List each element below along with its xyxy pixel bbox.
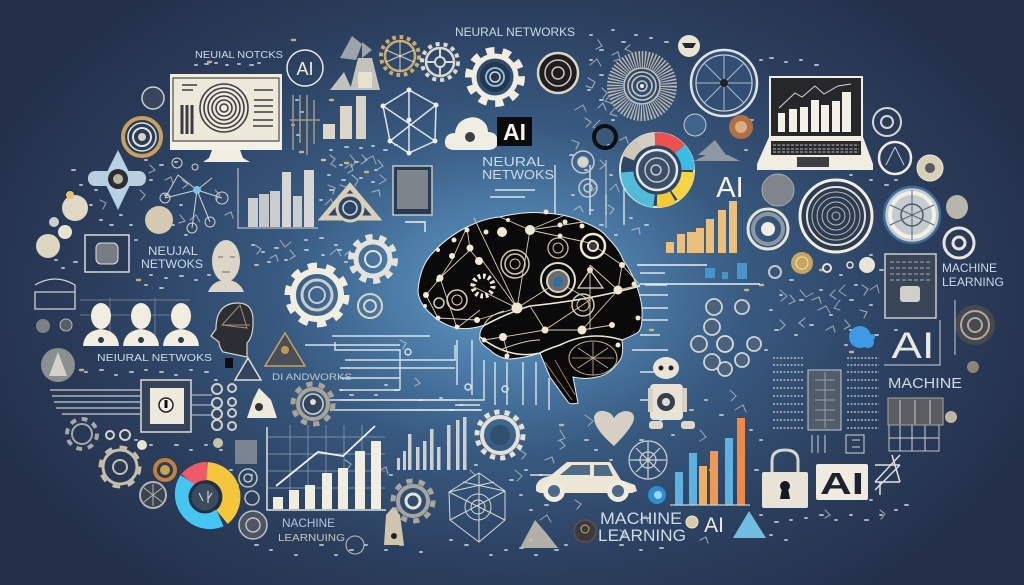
gear centre bbox=[477, 412, 523, 458]
network polygon bbox=[449, 473, 505, 542]
ring cluster bbox=[691, 299, 761, 376]
text: Machine Learning bottom bbox=[598, 509, 686, 545]
bar chart colourful bbox=[670, 418, 750, 505]
icon: head profile bbox=[211, 303, 253, 368]
icon: small circle bbox=[142, 87, 164, 109]
monitor with spiral bbox=[170, 74, 282, 162]
bar chart orange bbox=[666, 201, 737, 253]
text: Neural Networks centre: NETWOKS bbox=[482, 167, 554, 182]
icon: gray medallion bbox=[36, 319, 75, 382]
icon: parallelogram hatch bbox=[875, 455, 900, 495]
icon: diamond compass bbox=[88, 150, 146, 210]
text: Neural Networks left bbox=[141, 244, 203, 271]
orange ring bbox=[155, 460, 175, 480]
chart: spiral on monitor screen bbox=[200, 84, 248, 132]
text: Neural Networks left: NETWOKS bbox=[141, 257, 203, 271]
small cone icon bbox=[346, 507, 404, 554]
chart: people row bbox=[80, 298, 199, 346]
grid panel lower right bbox=[888, 398, 957, 451]
clutter: small scattered marks bbox=[55, 30, 908, 555]
icon: padlock bbox=[762, 450, 808, 508]
gears lower left bbox=[67, 419, 147, 487]
icon: robot bbox=[648, 357, 695, 429]
text columns panel bbox=[773, 358, 879, 453]
donut chart colours bbox=[620, 133, 694, 207]
icon: person bbox=[83, 303, 119, 346]
brain: network edges bbox=[426, 215, 640, 355]
icon: tan pyramid bbox=[520, 520, 558, 548]
line chart bbox=[267, 425, 386, 510]
title text: Neural Networks top: NEURAL NETWORKS bbox=[455, 25, 575, 39]
gear bottom left of centre bbox=[393, 481, 433, 521]
network diagram left bbox=[160, 158, 228, 233]
icon: bell triangle bbox=[247, 388, 277, 418]
text: Machine Learning bottom-left: LEARNUING bbox=[278, 532, 345, 544]
panel: square right bbox=[885, 254, 936, 318]
chip with lines bbox=[50, 380, 212, 432]
text: AI bottom: AI bbox=[704, 514, 724, 537]
vertical rule bbox=[605, 160, 607, 228]
text: AI big right: AI bbox=[892, 325, 934, 366]
text: And Works: DI ANDWORKS bbox=[272, 372, 352, 382]
text: Neural Notcks: NEUIAL NOTCKS bbox=[195, 49, 283, 61]
dark ring bbox=[594, 126, 616, 148]
panel: small frame bbox=[35, 279, 75, 309]
brain: circle motifs bbox=[434, 234, 617, 400]
text: Machine Learning right: MACHINE bbox=[942, 261, 997, 275]
ring stack bbox=[212, 384, 236, 430]
gear grey bbox=[293, 384, 333, 424]
gear tan bbox=[381, 37, 419, 75]
gear white spoked bbox=[422, 44, 458, 80]
laptop bbox=[757, 77, 873, 170]
text: Machine Learning bottom-left bbox=[278, 516, 345, 544]
ornate ring far right bbox=[955, 305, 995, 373]
small gold ring bbox=[686, 516, 698, 528]
gear circle lower right bbox=[748, 209, 788, 249]
text: Neural Networks centre: NEURAL bbox=[482, 154, 545, 169]
small rings by donut bbox=[239, 469, 267, 539]
icons mid right bbox=[684, 114, 753, 161]
AI white box bbox=[816, 464, 868, 501]
large ring bbox=[800, 180, 872, 252]
text: Neural Networks left: NEUJAL bbox=[148, 244, 198, 258]
text: Machine Learning bottom: LEARNING bbox=[598, 526, 686, 545]
circuit traces bbox=[305, 160, 670, 475]
square panel bbox=[393, 166, 432, 232]
circle dark top bbox=[538, 53, 578, 93]
gear big white bbox=[469, 51, 521, 103]
text: Machine Learning right: LEARNING bbox=[942, 275, 1004, 289]
icon: warning triangle bbox=[235, 358, 261, 380]
AI white box: AI bbox=[820, 466, 864, 501]
mixed icons bbox=[213, 438, 257, 464]
icon: cloud bbox=[445, 117, 498, 150]
icon: dark pin ring bbox=[574, 520, 596, 542]
small ring motifs bbox=[572, 151, 597, 197]
right edge rings bbox=[769, 108, 974, 278]
small blue icon bbox=[648, 486, 666, 504]
gear white 3 bbox=[288, 266, 346, 324]
brain: nodes bbox=[423, 210, 640, 358]
icon: warning tan triangle bbox=[265, 333, 305, 366]
framed image bbox=[85, 235, 129, 272]
text: Machine Learning bottom-left: NACHINE bbox=[282, 516, 335, 530]
grey disc bbox=[762, 174, 794, 206]
network hexagon bbox=[380, 88, 438, 156]
bars beige bbox=[290, 95, 366, 155]
gear triangle bbox=[323, 186, 377, 221]
icon: spiky spiral bbox=[615, 59, 669, 113]
icon: blue triangle bbox=[733, 511, 766, 538]
brain: lobe line bbox=[480, 286, 640, 355]
text: Neural Networks row: NEIURAL NETWOKS bbox=[97, 352, 212, 364]
icon: AI circle bbox=[287, 50, 323, 86]
icon: big lens bbox=[691, 50, 757, 116]
icon: AI circle: AI bbox=[296, 59, 314, 79]
text: Machine: MACHINE bbox=[888, 375, 962, 392]
brain bbox=[418, 210, 642, 404]
text: Machine Learning bottom: MACHINE bbox=[600, 509, 682, 528]
text: Machine Learning right bbox=[942, 261, 1004, 289]
disc bbox=[140, 482, 166, 508]
icon: person bbox=[163, 303, 199, 346]
icon: blue blob bbox=[849, 326, 875, 348]
chart: laptop bars bbox=[778, 92, 851, 132]
donut chart bbox=[184, 471, 231, 520]
text: Neural Networks centre bbox=[482, 154, 554, 182]
icon: heart bbox=[594, 411, 634, 446]
icon: person bbox=[123, 303, 159, 346]
bar chart grey bbox=[238, 168, 318, 228]
icon: cup top bbox=[678, 35, 700, 57]
icon: car bbox=[536, 462, 637, 502]
wheel ring bbox=[884, 187, 940, 243]
icon: head bust bbox=[208, 240, 244, 292]
icon: pyramids top bbox=[330, 36, 380, 90]
gear white 2 bbox=[351, 237, 395, 281]
icon: wheel target bbox=[629, 441, 667, 479]
grey bars bbox=[397, 417, 466, 470]
small blue bars bbox=[637, 263, 760, 284]
orbs left bbox=[36, 191, 173, 258]
text: AI large: AI bbox=[716, 172, 744, 204]
AI black box: AI bbox=[503, 119, 526, 145]
icon: small ring gear bbox=[358, 294, 382, 318]
icon: cog ring orange bbox=[123, 118, 161, 156]
AI black box bbox=[497, 117, 532, 146]
